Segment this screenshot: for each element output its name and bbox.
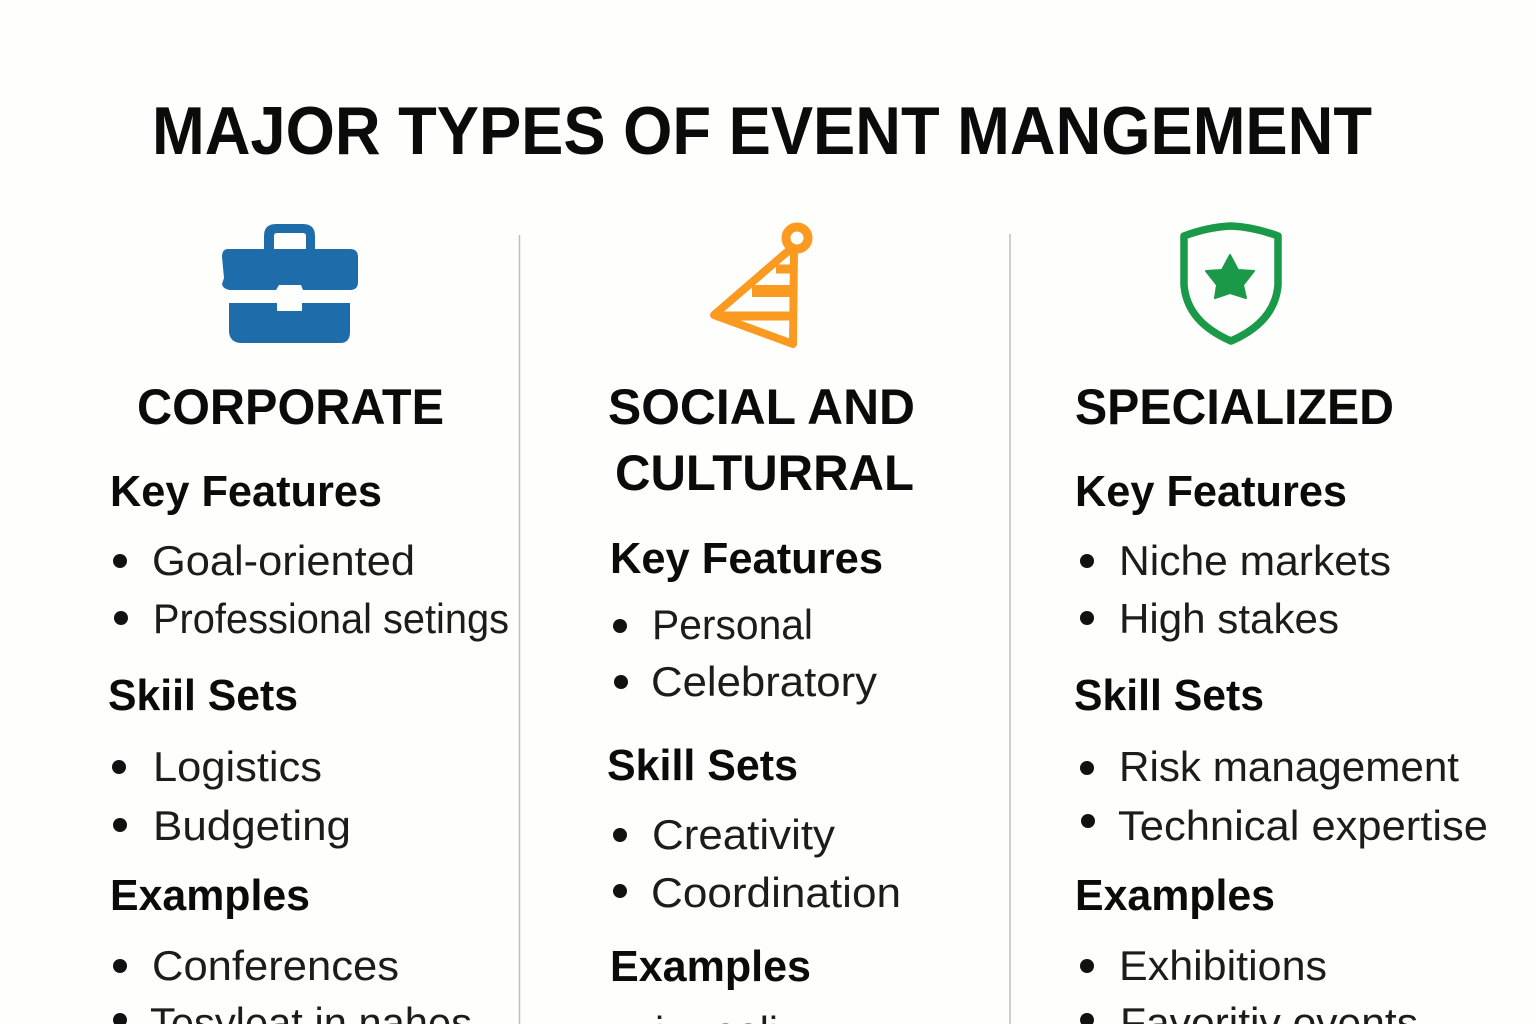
section: skill sets <box>108 671 351 849</box>
section: skill sets: Risk management <box>1119 743 1459 790</box>
section: examples: Examples <box>1075 871 1275 920</box>
section: skill sets: Creativity <box>652 811 835 858</box>
icon: briefcase <box>222 224 358 343</box>
section: examples: Examples <box>610 942 811 991</box>
section: skill sets: Skill Sets <box>607 741 798 790</box>
section: key features: Key Features <box>1075 467 1347 516</box>
section: key features: Key Features <box>610 534 883 583</box>
section: skill sets: Skiil Sets <box>108 671 298 720</box>
heading: social and culturral: CULTURRAL <box>615 445 914 501</box>
section: examples: Exhibitions <box>1119 942 1327 989</box>
section: key features <box>1075 467 1391 642</box>
heading: corporate: CORPORATE <box>137 379 444 435</box>
section: key features: Professional setings <box>153 595 509 642</box>
section: key features: Key Features <box>110 467 382 516</box>
section: examples <box>610 942 811 1024</box>
heading: social and culturral: SOCIAL AND <box>608 379 915 435</box>
heading: social and culturral <box>608 379 915 501</box>
section: skill sets: Coordination <box>651 869 901 916</box>
panel: corporate <box>108 224 509 1024</box>
section: skill sets: Budgeting <box>153 802 351 849</box>
heading: specialized: SPECIALIZED <box>1075 379 1394 435</box>
section: key features: Celebratory <box>651 658 877 705</box>
section: key features: Niche markets <box>1119 537 1391 584</box>
section: key features: Personal <box>652 601 813 648</box>
section: skill sets: Logistics <box>153 743 322 790</box>
title: MAJOR TYPES OF EVENT MANGEMENT <box>152 93 1372 169</box>
section: key features <box>110 467 509 642</box>
section: examples <box>110 871 472 1024</box>
icon: party hat <box>714 227 808 344</box>
panel: social and cultural <box>607 227 915 1024</box>
section: examples: Examples <box>110 871 310 920</box>
section: key features <box>610 534 883 705</box>
section: key features: Goal-oriented <box>152 537 415 584</box>
section: skill sets <box>607 741 901 916</box>
panel: specialized <box>1074 226 1488 1024</box>
section: examples: Conferences <box>152 942 399 989</box>
section: skill sets: Skill Sets <box>1074 671 1264 720</box>
icon: shield with star <box>1184 226 1278 341</box>
section: skill sets: Technical expertise <box>1118 802 1488 849</box>
section: examples <box>1075 871 1418 1024</box>
section: skill sets <box>1074 671 1488 849</box>
section: key features: High stakes <box>1119 595 1339 642</box>
